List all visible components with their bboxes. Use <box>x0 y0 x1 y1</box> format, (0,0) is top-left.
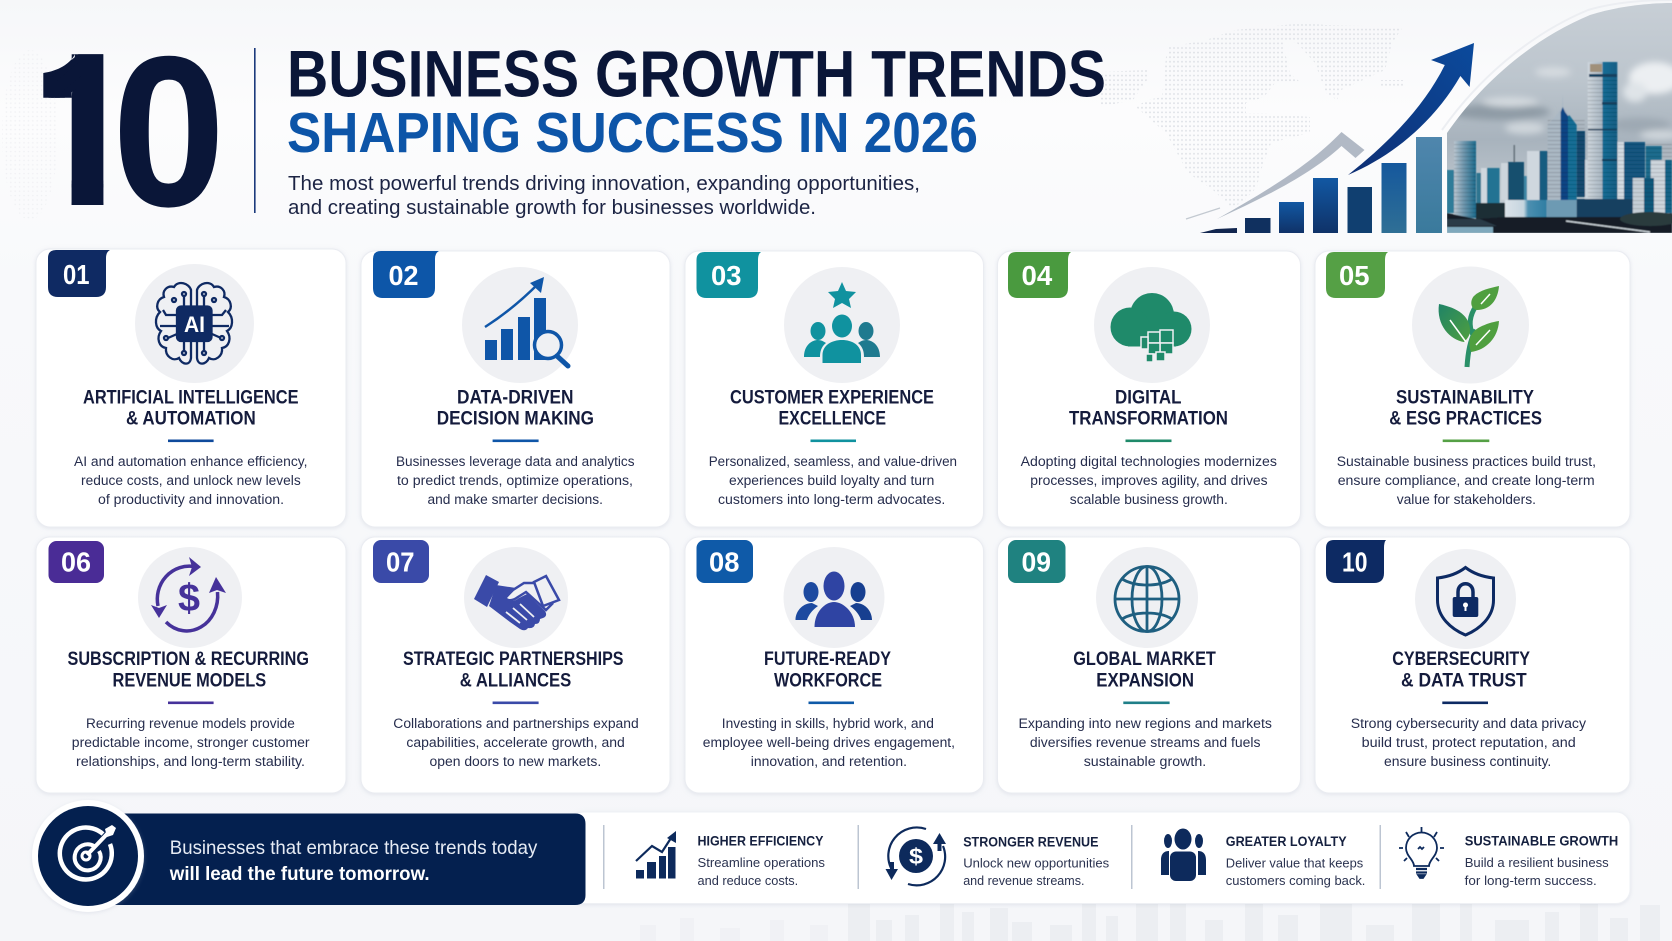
arc outline <box>1442 0 1672 130</box>
panel: card 08 workforce <box>685 537 984 793</box>
number badge 09 <box>1008 540 1066 583</box>
icon circle <box>135 264 254 383</box>
icon circle <box>462 267 578 383</box>
card description: processes, improves agility, and drives <box>1030 473 1268 489</box>
icon: bar chart with magnifier <box>485 277 568 366</box>
thin swoosh line <box>1186 208 1220 219</box>
card description <box>1351 716 1587 770</box>
icon: AI brain: AI <box>184 312 205 337</box>
benefit: stronger revenue: Unlock new opportunities <box>963 856 1110 871</box>
card title <box>1392 649 1530 692</box>
city photo panel <box>1440 0 1672 233</box>
card title <box>68 649 309 692</box>
benefit text: HIGHER EFFICIENCY <box>698 834 824 850</box>
card title: STRATEGIC PARTNERSHIPS <box>403 649 624 670</box>
title rule <box>1126 440 1172 442</box>
card description: AI and automation enhance efficiency, <box>74 454 308 470</box>
card title <box>1069 388 1228 430</box>
target badge <box>32 800 144 912</box>
icon circle <box>784 267 900 383</box>
world map dot texture <box>1100 18 1410 210</box>
card title: EXPANSION <box>1096 670 1194 692</box>
big number 10: 1 <box>40 10 131 252</box>
card title: GLOBAL MARKET <box>1073 649 1216 670</box>
benefit: greater loyalty <box>1131 825 1365 889</box>
card description: reduce costs, and unlock new levels <box>81 473 301 489</box>
icon: revenue cycle: $ <box>909 844 923 869</box>
benefit: stronger revenue: and revenue streams. <box>963 873 1084 888</box>
big number 10 <box>43 54 218 208</box>
title rule <box>810 440 856 442</box>
panel: call to action banner <box>32 800 586 912</box>
card description: open doors to new markets. <box>430 754 601 770</box>
number badge 04: 04 <box>1022 260 1053 291</box>
card title: REVENUE MODELS <box>112 670 266 692</box>
icon circle <box>138 547 242 648</box>
title rule <box>1443 440 1489 442</box>
card title <box>403 649 624 692</box>
card description: and make smarter decisions. <box>428 492 603 508</box>
card background <box>998 251 1300 527</box>
icon: globe <box>1115 566 1179 632</box>
card title: DECISION MAKING <box>437 408 594 430</box>
title rule <box>493 440 539 442</box>
benefit: sustainable growth: Build a resilient business <box>1465 855 1609 870</box>
panel: card 04 digital transformation <box>998 251 1300 527</box>
icon circle <box>784 547 884 648</box>
icon: AI brain <box>156 283 232 364</box>
icon circle <box>1412 266 1529 384</box>
card title: & DATA TRUST <box>1401 670 1527 692</box>
icon: light bulb <box>1399 827 1444 878</box>
card description: customers into long-term advocates. <box>718 492 945 508</box>
benefit: stronger revenue <box>858 825 1110 889</box>
icon circle <box>1096 547 1198 648</box>
card description: sustainable growth. <box>1084 754 1206 770</box>
card title <box>1389 388 1542 430</box>
growth bars <box>1200 228 1237 233</box>
title rule <box>168 702 214 704</box>
blue growth arrow <box>1348 43 1474 175</box>
icon: recurring dollar: $ <box>178 577 200 620</box>
header subtitle <box>288 172 920 219</box>
card background <box>685 537 984 793</box>
icon: handshake <box>474 575 559 630</box>
white separator <box>1442 133 1447 233</box>
number badge 10 <box>1326 540 1386 583</box>
card description <box>72 716 310 770</box>
header divider <box>254 48 256 213</box>
number badge 03: 03 <box>711 260 742 291</box>
card title: & ESG PRACTICES <box>1389 408 1542 430</box>
number badge 06 <box>48 541 104 583</box>
card title <box>83 388 298 430</box>
grey arrow <box>1217 132 1364 219</box>
icon: target with arrow <box>60 825 116 879</box>
icon: loyal customers <box>1161 828 1206 881</box>
number badge 07: 07 <box>386 546 414 578</box>
card description: of productivity and innovation. <box>98 492 284 508</box>
number badge 08: 08 <box>709 546 739 578</box>
panel: card 10 cybersecurity <box>1315 537 1630 793</box>
card title <box>730 388 934 430</box>
card title: & AUTOMATION <box>126 408 256 430</box>
card description <box>703 716 955 770</box>
card description: to predict trends, optimize operations, <box>397 473 633 489</box>
card description <box>1018 716 1272 770</box>
big number 10: 0 <box>112 13 225 251</box>
card title: WORKFORCE <box>774 670 882 692</box>
card description: Sustainable business practices build trust, <box>1337 454 1596 470</box>
number badge 02 <box>373 251 439 298</box>
card description: Expanding into new regions and markets <box>1018 716 1272 732</box>
card title: CUSTOMER EXPERIENCE <box>730 388 934 408</box>
benefit: higher efficiency: and reduce costs. <box>698 873 798 888</box>
benefit: sustainable growth: for long-term success. <box>1465 873 1597 888</box>
panel: card 02 data-driven decision making <box>361 251 670 527</box>
panel: card 07 partnerships <box>361 537 670 793</box>
icon: workforce people <box>796 572 872 627</box>
banner bar <box>110 814 586 905</box>
card description: predictable income, stronger customer <box>72 735 310 751</box>
number badge 05: 05 <box>1339 260 1370 291</box>
panel: benefits strip <box>570 812 1630 904</box>
card description: Investing in skills, hybrid work, and <box>722 716 934 732</box>
card description: diversifies revenue streams and fuels <box>1030 735 1260 751</box>
card title: SUBSCRIPTION & RECURRING <box>68 649 309 670</box>
benefit text: SUSTAINABLE GROWTH <box>1465 834 1618 850</box>
card description: ensure compliance, and create long-term <box>1338 473 1595 489</box>
card background <box>36 249 346 527</box>
card description: Strong cybersecurity and data privacy <box>1351 716 1587 732</box>
card title: SUSTAINABILITY <box>1396 388 1534 408</box>
header city illustration <box>1186 0 1672 233</box>
number badge 06: 06 <box>61 546 91 578</box>
number badge 09: 09 <box>1022 546 1051 578</box>
card title: & ALLIANCES <box>460 670 571 692</box>
card title: EXCELLENCE <box>778 408 886 430</box>
card description <box>396 454 634 508</box>
card background <box>361 251 670 527</box>
card description <box>1337 454 1596 508</box>
card description: ensure business continuity. <box>1384 754 1551 770</box>
number badge 05 <box>1326 252 1388 298</box>
background skyline silhouette <box>640 895 1660 941</box>
card background <box>685 251 984 527</box>
icon: shield with lock <box>1438 568 1494 635</box>
number badge 07 <box>373 540 429 583</box>
card title: ARTIFICIAL INTELLIGENCE <box>83 388 298 408</box>
card description: Personalized, seamless, and value-driven <box>709 454 957 470</box>
card description: employee well-being drives engagement, <box>703 735 955 751</box>
icon circle <box>1094 267 1210 383</box>
panel: card 05 sustainability <box>1315 251 1630 527</box>
title rule <box>168 440 214 442</box>
card title: DIGITAL <box>1115 388 1182 408</box>
card description <box>74 454 308 508</box>
card description: Collaborations and partnerships expand <box>393 716 639 732</box>
card title: TRANSFORMATION <box>1069 408 1228 430</box>
header subtitle: and creating sustainable growth for businesses worldwide. <box>288 196 816 219</box>
card background <box>1315 537 1630 793</box>
card title: FUTURE-READY <box>764 649 891 670</box>
icon: cloud with data blocks <box>1110 293 1192 362</box>
benefit: higher efficiency: Streamline operations <box>698 855 825 870</box>
number badge 10: 10 <box>1342 546 1368 578</box>
card description: Businesses leverage data and analytics <box>396 454 634 470</box>
header subtitle: The most powerful trends driving innovation, expanding opportunities, <box>288 172 920 195</box>
card title <box>764 649 891 692</box>
number badge 04 <box>1008 252 1071 298</box>
banner text <box>169 837 538 885</box>
card description: value for stakeholders. <box>1397 492 1536 508</box>
card description: build trust, protect reputation, and <box>1362 735 1576 751</box>
icon: revenue cycle <box>886 827 946 885</box>
title rule <box>1442 702 1488 704</box>
title line 2: SHAPING SUCCESS IN 2026 <box>287 101 978 165</box>
card background <box>1315 251 1630 527</box>
benefit text: GREATER LOYALTY <box>1226 834 1347 850</box>
card background <box>998 537 1300 793</box>
number badge 01 <box>48 250 110 297</box>
card description: Adopting digital technologies modernizes <box>1021 454 1277 470</box>
card description: experiences build loyalty and turn <box>729 473 934 489</box>
card background <box>36 537 346 793</box>
icon: star and customers <box>804 282 880 363</box>
icon: recurring dollar <box>151 557 226 631</box>
card background <box>361 537 670 793</box>
title line 1: BUSINESS GROWTH TRENDS <box>287 36 1106 110</box>
banner text: will lead the future tomorrow. <box>169 863 430 885</box>
card title: CYBERSECURITY <box>1392 649 1530 670</box>
card description: scalable business growth. <box>1070 492 1228 508</box>
icon: rising bars <box>636 831 676 878</box>
title rule <box>493 702 539 704</box>
panel: card 06 subscription <box>36 537 346 793</box>
card title <box>437 388 594 430</box>
banner text: Businesses that embrace these trends today <box>170 837 538 859</box>
benefit text: STRONGER REVENUE <box>963 835 1098 851</box>
title rule <box>808 702 854 704</box>
number badge 08 <box>696 540 753 583</box>
benefit: sustainable growth <box>1380 825 1618 889</box>
card description <box>1021 454 1277 508</box>
card description: capabilities, accelerate growth, and <box>406 735 625 751</box>
icon: plant leaves <box>1439 286 1499 367</box>
card description <box>709 454 957 508</box>
panel: card 03 customer experience <box>685 251 984 527</box>
number badge 01: 01 <box>63 259 90 290</box>
icon circle <box>464 547 568 648</box>
panel: card 09 global market <box>998 537 1300 793</box>
card description <box>393 716 639 770</box>
panel: card 01 artificial intelligence <box>36 249 346 527</box>
icon circle <box>1415 549 1516 649</box>
card title <box>1073 649 1216 692</box>
title rule <box>1123 702 1170 704</box>
number badge 03 <box>696 252 761 298</box>
card description: Recurring revenue models provide <box>86 716 295 732</box>
benefit: higher efficiency <box>603 825 825 889</box>
benefit: greater loyalty: Deliver value that keeps <box>1226 856 1364 871</box>
number badge 02: 02 <box>388 260 418 291</box>
card description: innovation, and retention. <box>751 754 907 770</box>
card title: DATA-DRIVEN <box>457 388 574 408</box>
left dotted texture <box>2 50 58 220</box>
benefit: greater loyalty: customers coming back. <box>1226 873 1365 888</box>
card description: relationships, and long-term stability. <box>76 754 305 770</box>
